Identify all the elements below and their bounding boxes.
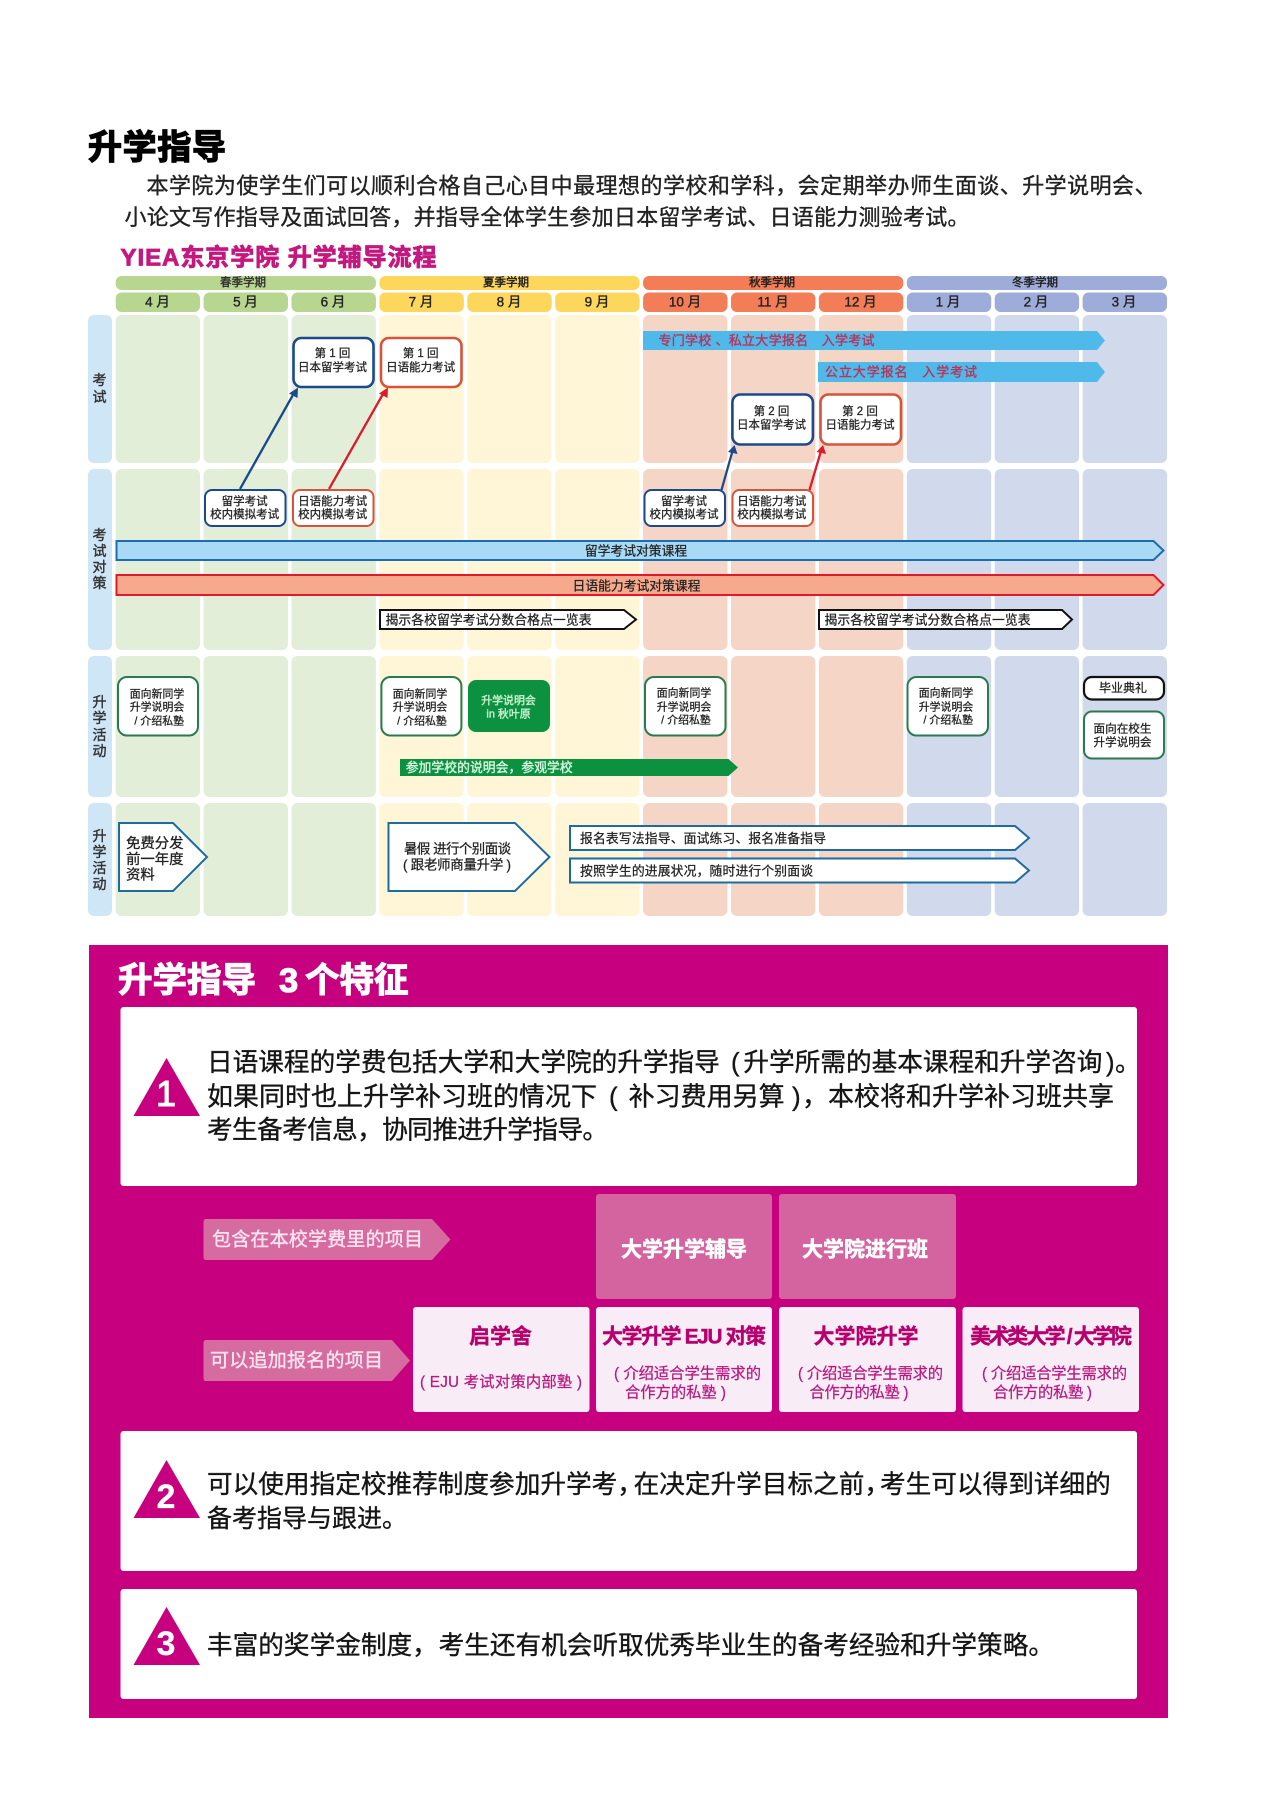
box: university EJU: ( 介绍适合学生需求的 <box>614 1366 761 1382</box>
arrow: school visits <box>400 759 738 776</box>
card 2 <box>120 1431 1137 1571</box>
arrow: progress interview: 按照学生的进展状况，随时进行个别面谈 <box>580 864 813 878</box>
chart: grid row 3 activities: 升 <box>92 694 106 710</box>
icon: triangle 1 <box>134 1058 200 1116</box>
intro text: 本学院为使学生们可以顺利合格自己心目中最理想的学校和学科，会定期举办师生面谈、升学说明会、 <box>146 174 1156 198</box>
card 1 text: 日语课程的学费包括大学和大学院的升学指导 <box>207 1048 720 1077</box>
box: art schools: 合作方的私塾 ) <box>993 1384 1092 1402</box>
arrow: application guidance <box>570 826 1029 850</box>
card 1 text: 本校将和升学补习班共享 <box>828 1082 1114 1112</box>
intro text <box>124 174 1156 230</box>
mock exam: JLPT spring: 日语能力考试 <box>298 494 368 508</box>
card 1 text: 升学所需的基本课程和升学咨询 <box>743 1048 1102 1077</box>
card 1 text: ( <box>731 1049 740 1077</box>
event: new student briefing January: 面向新同学 <box>919 686 973 700</box>
arrow: free materials: 免费分发 <box>126 835 184 852</box>
chart: month headers: 10 月 <box>669 294 701 310</box>
card 3 text: 考生还有机会听取优秀毕业生的备考经验和升学策略。 <box>439 1631 1054 1660</box>
mock exam: JLPT spring: 校内模拟考试 <box>298 507 368 521</box>
box: graduate prep <box>779 1194 956 1299</box>
card 2 text: 在决定升学目标之前， <box>634 1470 890 1499</box>
arrow: summer interview: 暑假 进行个别面谈 <box>404 842 512 856</box>
arrow: private university application bar <box>643 331 1105 350</box>
arrow: EJU mock to round 1 <box>240 388 298 489</box>
exam: JLPT round 2 <box>820 394 901 444</box>
icon: triangle 3: 3 <box>157 1625 175 1663</box>
event: new student briefing April: 面向新同学 <box>130 686 184 700</box>
card 2 text: 备考指导与跟进。 <box>207 1505 407 1533</box>
label arrow: included items: 包含在本校学费里的项目 <box>212 1228 423 1250</box>
mock exam: EJU autumn <box>644 490 725 526</box>
panel heading: 个特征 <box>305 962 408 1000</box>
season: winter: 冬季学期 <box>1012 275 1058 289</box>
chart: grid row 4 activities: 活 <box>92 860 106 876</box>
arrow: private university application bar: 专门学校 、私立大学报名 入学考试 <box>658 333 874 348</box>
box: Keigakusha: ( EJU 考试对策内部塾 ) <box>420 1374 582 1391</box>
mock exam: JLPT autumn: 日语能力考试 <box>737 494 807 508</box>
chart: grid row 1 exams: 试 <box>92 389 106 405</box>
card 3 <box>120 1589 1137 1699</box>
event: new student briefing January: / 介绍私塾 <box>923 713 973 727</box>
chart: month headers: 4 月 <box>145 294 170 310</box>
card 1 text: 补习费用另算 <box>629 1082 785 1112</box>
event: new student briefing April: / 介绍私塾 <box>134 713 184 727</box>
exam: EJU round 1: 日本留学考试 <box>298 360 367 374</box>
event: new student briefing January: 升学说明会 <box>919 700 973 714</box>
chart: grid row 4 activities: 动 <box>92 876 106 892</box>
exam: JLPT round 1: 日语能力考试 <box>386 360 456 374</box>
exam: EJU round 1: 第 1 回 <box>315 346 350 360</box>
chart: grid row 1 exams <box>88 315 1167 463</box>
mock exam: JLPT autumn: 校内模拟考试 <box>737 507 807 521</box>
exam: EJU round 2: 日本留学考试 <box>737 418 806 432</box>
box: graduate school: 大学院升学 <box>814 1324 918 1348</box>
chart: grid row 3 activities: 活 <box>92 727 106 743</box>
arrow: public university application bar <box>818 362 1105 382</box>
mock exam: JLPT spring <box>293 490 374 526</box>
card 1 text: ) <box>792 1082 801 1112</box>
box: graduate school: 合作方的私塾 ) <box>810 1384 908 1402</box>
box: university EJU: 大学升学 EJU 对策 <box>602 1324 766 1348</box>
panel heading: 3 <box>279 962 298 1000</box>
chart: month headers: 5 月 <box>233 294 258 310</box>
label arrow: included items <box>204 1219 450 1260</box>
arrow: EJU prep course: 留学考试对策课程 <box>585 544 687 558</box>
arrow: free materials: 前一年度 <box>126 851 184 868</box>
mock exam: EJU autumn: 校内模拟考试 <box>650 507 719 521</box>
chart: grid row 3 activities: 动 <box>92 743 106 759</box>
icon: triangle 3 <box>134 1607 200 1665</box>
mock exam: EJU spring <box>205 490 286 526</box>
mock exam: EJU spring: 校内模拟考试 <box>210 507 280 521</box>
season: summer: 夏季学期 <box>483 275 529 289</box>
arrow: score list spring <box>380 610 636 629</box>
event: Akihabara briefing <box>468 680 550 732</box>
card 1 text: 如果同时也上升学补习班的情况下 <box>207 1082 597 1112</box>
box: university prep: 大学升学辅导 <box>621 1238 747 1262</box>
panel: three features <box>89 945 1168 1718</box>
arrow: EJU prep course <box>116 541 1164 560</box>
chart: month headers: 3 月 <box>1112 294 1136 310</box>
card 2 text: 考生可以得到详细的 <box>880 1470 1111 1499</box>
mock exam: EJU spring: 留学考试 <box>222 494 268 508</box>
event: current student briefing: 面向在校生 <box>1094 722 1151 736</box>
arrow: public university application bar: 公立大学报名 入学考试 <box>825 364 977 380</box>
label arrow: optional items <box>204 1340 410 1381</box>
icon: triangle 2 <box>134 1460 200 1518</box>
exam: EJU round 2: 第 2 回 <box>754 404 789 418</box>
chart: grid row 2 exam preparation: 策 <box>92 575 106 591</box>
card 3 text: 丰富的奖学金制度， <box>207 1631 438 1660</box>
event: new student briefing July: 面向新同学 <box>393 686 447 700</box>
card 1 text: ) <box>1106 1049 1115 1077</box>
chart: grid row 4 activities <box>88 803 1167 916</box>
box: graduate school: ( 介绍适合学生需求的 <box>798 1366 943 1382</box>
card 2 text <box>207 1470 1111 1533</box>
card 1 <box>120 1007 1141 1186</box>
panel heading: 升学指导 <box>118 962 256 1000</box>
event: new student briefing October: / 介绍私塾 <box>661 713 711 727</box>
intro text: 小论文写作指导及面试回答，并指导全体学生参加日本留学考试、日语能力测验考试。 <box>124 205 970 230</box>
arrow: progress interview <box>570 858 1029 882</box>
event: current student briefing: 升学说明会 <box>1094 735 1152 749</box>
box: art schools: ( 介绍适合学生需求的 <box>982 1366 1127 1382</box>
chart: month headers: 2 月 <box>1024 294 1048 310</box>
arrow: JLPT prep course: 日语能力考试对策课程 <box>573 578 701 594</box>
exam: JLPT round 1: 第 1 回 <box>403 346 438 360</box>
season: spring: 春季学期 <box>220 275 266 289</box>
event: new student briefing July <box>381 677 461 736</box>
arrow: school visits: 参加学校的说明会，参观学校 <box>406 760 573 775</box>
arrow: score list winter: 揭示各校留学考试分数合格点一览表 <box>824 612 1031 628</box>
chart: month headers: 6 月 <box>321 294 345 310</box>
arrow: summer interview: ( 跟老师商量升学 ) <box>403 858 511 872</box>
exam: JLPT round 2: 第 2 回 <box>842 404 878 418</box>
arrow: JLPT mock to round 2 <box>810 445 826 490</box>
season: autumn <box>643 275 903 290</box>
chart: grid row 2 exam preparation: 试 <box>92 543 106 559</box>
arrow: score list winter <box>819 610 1072 629</box>
event: graduation ceremony: 毕业典礼 <box>1099 680 1147 695</box>
arrow: EJU mock to round 2 <box>722 445 738 490</box>
arrow: free materials <box>119 823 207 891</box>
season: spring <box>116 275 376 290</box>
event: new student briefing July: / 介绍私塾 <box>397 713 447 727</box>
chart: month headers: 11 月 <box>757 294 789 310</box>
chart: month headers: 8 月 <box>497 294 521 310</box>
chart: grid row 4 activities: 学 <box>92 844 106 860</box>
box: university EJU <box>596 1307 772 1412</box>
box: graduate prep: 大学院进行班 <box>802 1238 928 1262</box>
chart: grid row 3 activities: 学 <box>92 710 106 726</box>
event: Akihabara briefing: in 秋叶原 <box>486 706 531 720</box>
event: Akihabara briefing: 升学说明会 <box>481 693 536 707</box>
card 2 text: 可以使用指定校推荐制度参加升学考， <box>207 1470 643 1499</box>
chart: grid row 2 exam preparation: 考 <box>92 527 106 543</box>
chart: grid row 4 activities: 升 <box>92 828 106 844</box>
arrow: summer interview <box>388 823 550 891</box>
season: winter <box>907 275 1167 290</box>
title: 升学指导 <box>88 129 226 167</box>
chart: month headers: 7 月 <box>409 294 433 310</box>
event: new student briefing January <box>908 677 988 736</box>
mock exam: JLPT autumn <box>732 490 813 526</box>
exam: JLPT round 1 <box>381 338 462 387</box>
chart: month headers: 12 月 <box>844 294 877 310</box>
box: Keigakusha: 启学舍 <box>469 1324 532 1348</box>
exam: JLPT round 2: 日语能力考试 <box>826 418 895 432</box>
box: art schools <box>962 1307 1139 1412</box>
chart: month headers: 9 月 <box>585 294 609 310</box>
event: new student briefing July: 升学说明会 <box>393 700 447 714</box>
exam: EJU round 1 <box>294 338 374 387</box>
icon: triangle 2: 2 <box>157 1478 175 1516</box>
event: new student briefing October: 升学说明会 <box>657 700 711 714</box>
mock exam: EJU autumn: 留学考试 <box>661 494 707 508</box>
chart: month headers: 1 月 <box>936 294 960 310</box>
event: new student briefing October <box>645 677 726 736</box>
label arrow: optional items: 可以追加报名的项目 <box>210 1350 383 1372</box>
chart: grid row 1 exams: 考 <box>92 372 106 388</box>
arrow: JLPT mock to round 1 <box>329 388 388 489</box>
box: art schools: 美术类大学 / 大学院 <box>970 1324 1132 1348</box>
flow chart heading: YIEA东京学院 升学辅导流程 <box>120 244 436 272</box>
season: autumn: 秋季学期 <box>749 275 795 289</box>
event: graduation ceremony <box>1084 677 1164 700</box>
card 1 text <box>207 1048 1141 1144</box>
box: university EJU: 合作方的私塾 ) <box>625 1384 726 1402</box>
box: Keigakusha <box>413 1307 590 1412</box>
card 1 text: 考生备考信息，协同推进升学指导。 <box>207 1116 608 1144</box>
box: graduate school <box>779 1307 956 1412</box>
card 1 text: 。 <box>1115 1049 1141 1077</box>
arrow: free materials: 资料 <box>126 867 155 884</box>
season: summer <box>379 275 640 290</box>
box: university prep <box>596 1194 772 1299</box>
arrow: JLPT prep course <box>116 575 1164 595</box>
chart: grid row 2 exam preparation <box>88 469 1167 650</box>
icon: triangle 1: 1 <box>156 1073 176 1114</box>
chart: grid row 2 exam preparation: 对 <box>92 559 106 575</box>
exam: EJU round 2 <box>732 394 813 444</box>
chart: month headers <box>116 292 1167 312</box>
chart: season headers <box>116 275 1167 290</box>
card 1 text: ， <box>802 1082 828 1112</box>
chart: grid row 3 activities <box>88 656 1167 797</box>
arrow: score list spring: 揭示各校留学考试分数合格点一览表 <box>386 612 592 628</box>
event: current student briefing <box>1084 712 1164 758</box>
event: new student briefing April <box>118 677 198 736</box>
arrow: application guidance: 报名表写法指导、面试练习、报名准备指导 <box>580 831 826 846</box>
event: new student briefing October: 面向新同学 <box>657 686 711 700</box>
event: new student briefing April: 升学说明会 <box>130 700 184 714</box>
card 1 text: ( <box>609 1082 618 1112</box>
